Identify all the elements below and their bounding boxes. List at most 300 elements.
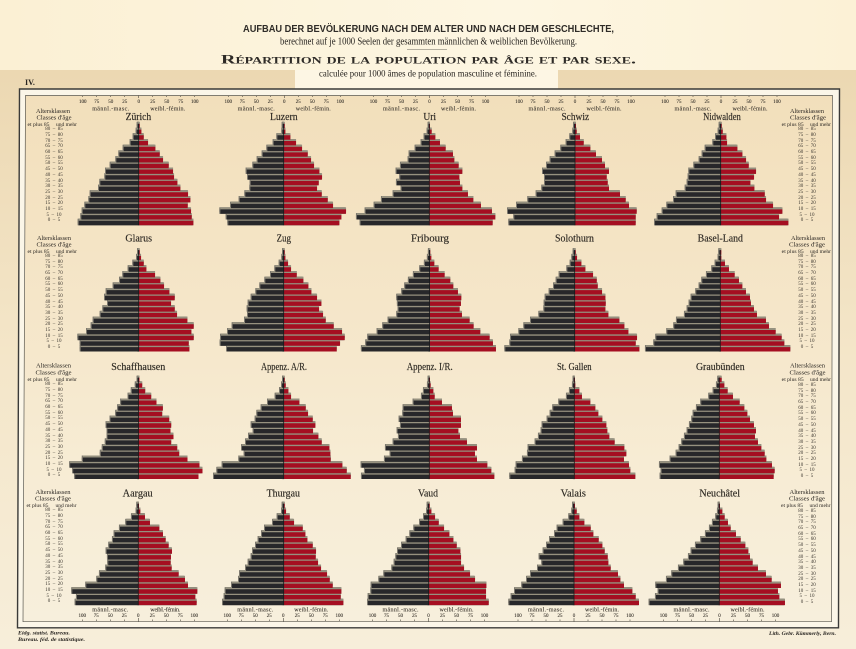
pyramid	[368, 504, 489, 605]
panel: Vaud	[368, 489, 489, 605]
age heading right row 4: und mehr	[810, 503, 831, 509]
bottom axes: 75	[759, 614, 764, 619]
age scale right row 2: 15 – 20	[798, 328, 816, 333]
age scale right row 4: 45 – 50	[798, 549, 816, 554]
age scale left row 1: 5 – 10	[47, 213, 61, 218]
panel: Schwiz	[508, 112, 637, 225]
top axes: 25	[413, 100, 418, 105]
top axes: 25	[558, 100, 564, 105]
bottom axes: 75	[384, 614, 390, 619]
pyramid	[646, 250, 790, 352]
age scale right row 3: 25 – 30	[798, 446, 816, 451]
name: Appenz. A/R.	[261, 362, 307, 373]
bottom axes: 25	[558, 614, 563, 619]
age scale right row 2: 30 – 35	[798, 311, 816, 316]
age scale right row 3: 60 – 65	[798, 406, 816, 411]
age heading right row 4	[781, 489, 831, 509]
pyramid	[509, 504, 639, 605]
age scale right row 4: 75 – 80	[798, 515, 816, 520]
credit right: Lith. Gebr. Kümmerly, Bern.	[768, 631, 836, 637]
age scale left row 2: 70 – 75	[45, 265, 63, 270]
name: Valais	[561, 489, 586, 500]
age heading right row 3: Altersklassen	[790, 362, 825, 369]
pyramid	[362, 378, 494, 479]
top axes: 100	[370, 100, 378, 105]
age heading left row 3: et plus 85	[28, 377, 50, 383]
panel: Nidwalden	[655, 112, 788, 225]
bottom axes: 100	[481, 614, 489, 619]
top axes: 100	[191, 100, 199, 105]
pyramid	[505, 250, 639, 352]
age scale right row 2: 0 – 5	[801, 345, 813, 350]
name: Schaffhausen	[111, 362, 165, 373]
age scale right row 3: 55 – 60	[798, 411, 816, 416]
top axes: 50	[455, 100, 460, 105]
age scale right row 4: 5 – 10	[800, 594, 814, 599]
top axes: 50	[164, 100, 170, 105]
bottom axes: weibl.-fémin.	[440, 606, 474, 613]
bottom axes: 100	[772, 614, 780, 619]
panel: St. Gallen	[510, 362, 635, 479]
pyramid	[70, 378, 202, 479]
age scale left row 2: 25 – 30	[45, 317, 63, 322]
age scale right row 4	[798, 508, 816, 605]
age heading left row 2: Classes d'âge	[36, 242, 72, 248]
age heading left row 4: et plus 85	[26, 503, 49, 509]
pyramid	[223, 504, 343, 605]
age scale right row 2: 45 – 50	[798, 294, 816, 299]
age scale left row 4: 80 – 85	[45, 508, 63, 513]
top axes: 100	[773, 100, 781, 105]
age scale right row 4: 10 – 15	[798, 589, 816, 594]
age scale right row 1: 80 – 85	[798, 127, 816, 132]
bottom axes: 75	[468, 614, 474, 619]
top axes: 0	[137, 100, 140, 105]
panel: Basel-Land	[646, 234, 790, 352]
name: St. Gallen	[557, 362, 592, 373]
age scale left row 2: 65 – 70	[45, 271, 63, 276]
age scale right row 4: 15 – 20	[798, 583, 816, 588]
bottom axes: weibl.-fémin.	[730, 606, 765, 613]
bottom axes: 0	[427, 614, 430, 619]
name: Solothurn	[555, 234, 594, 245]
pyramid	[655, 124, 788, 225]
age heading left row 3: Altersklassen	[36, 362, 71, 369]
bottom axes: 75	[530, 614, 535, 619]
age scale left row 4: 65 – 70	[45, 525, 63, 530]
top axes: 25	[441, 100, 446, 105]
age scale left row 2: 30 – 35	[45, 311, 63, 316]
name: Neuchâtel	[699, 489, 740, 500]
age scale right row 4: 70 – 75	[798, 520, 816, 525]
panel: Schaffhausen	[70, 362, 202, 479]
age scale right row 3: 30 – 35	[798, 440, 816, 445]
age scale right row 2: 80 – 85	[798, 254, 816, 259]
bottom axes: 25	[731, 614, 736, 619]
age scale left row 2: 0 – 5	[48, 345, 60, 350]
age heading left row 4: Altersklassen	[36, 489, 70, 496]
age scale right row 3: 10 – 15	[798, 463, 816, 468]
bottom axes: weibl.-fémin.	[294, 606, 329, 613]
top axes: 75	[94, 100, 100, 105]
age scale right row 1: 70 – 75	[798, 139, 816, 144]
age scale left row 3: 65 – 70	[45, 399, 63, 404]
name: Luzern	[270, 112, 298, 123]
top axes: 75	[469, 100, 474, 105]
age scale right row 4: 80 – 85	[798, 509, 816, 514]
age scale right row 1: 40 – 45	[798, 173, 816, 178]
age heading left row 2	[28, 235, 77, 255]
panel: Fribourg	[362, 234, 496, 352]
bottom axes	[79, 606, 780, 622]
pyramid	[78, 250, 194, 352]
age heading right row 1	[782, 108, 831, 128]
top axes: 75	[760, 100, 766, 105]
bottom axes: 25	[295, 614, 300, 619]
age heading right row 2: und mehr	[810, 249, 831, 255]
age heading right row 2	[782, 235, 831, 255]
age scale left row 3: 40 – 45	[45, 428, 63, 433]
top axes: 100	[482, 100, 490, 105]
name: Glarus	[125, 234, 152, 245]
German heading: AUFBAU DER BEVÖLKERUNG NACH DEM ALTER UND NACH DEM GESCHLECHTE,	[243, 22, 614, 35]
age scale right row 3: 45 – 50	[798, 423, 816, 428]
pyramid	[214, 378, 351, 479]
top axes: weibl.-fémin.	[586, 105, 622, 112]
age scale left row 1: 25 – 30	[45, 190, 63, 195]
pyramid	[79, 124, 193, 225]
bottom axes: 75	[614, 614, 619, 619]
name: Zug	[277, 234, 291, 245]
age scale left row 1: 10 – 15	[45, 207, 63, 212]
age scale right row 3: 20 – 25	[798, 451, 816, 456]
panel: Valais	[509, 489, 639, 605]
age scale left row 4: 50 – 55	[45, 542, 63, 547]
top axes: männl.-masc.	[92, 106, 130, 112]
age heading left row 2: Altersklassen	[37, 235, 71, 242]
top axes: 100	[661, 100, 669, 105]
age scale left row 1: 65 – 70	[45, 144, 63, 149]
pyramid	[508, 124, 637, 225]
age scale left row 2: 75 – 80	[45, 260, 63, 265]
age scale left row 2: 10 – 15	[45, 334, 63, 339]
name: Appenz. I/R.	[407, 362, 453, 373]
top axes: 75	[178, 100, 184, 105]
age heading right row 3	[782, 362, 831, 383]
bottom axes: männl.-masc.	[237, 607, 274, 613]
age heading left row 3: und mehr	[56, 377, 77, 383]
panel: Appenzell A.R.	[214, 362, 351, 479]
age scale right row 2	[798, 254, 816, 350]
pyramid	[660, 378, 775, 479]
age scale left row 3: 80 – 85	[45, 382, 63, 387]
bottom axes: 50	[689, 614, 694, 619]
age scale right row 1: 60 – 65	[798, 150, 816, 155]
age scale right row 1: 0 – 5	[801, 218, 813, 223]
age heading right row 3: et plus 85	[782, 377, 804, 383]
age scale right row 1: 75 – 80	[798, 133, 816, 138]
bottom axes: 50	[253, 614, 258, 619]
age scale right row 4: 35 – 40	[798, 560, 816, 565]
age scale left row 4: 45 – 50	[45, 548, 63, 553]
top axes: 75	[614, 100, 620, 105]
age scale right row 4: 60 – 65	[798, 532, 816, 537]
age heading right row 1: Altersklassen	[790, 108, 824, 115]
bottom axes: 75	[94, 614, 99, 619]
top axes: 25	[586, 100, 592, 105]
age heading left row 1: Altersklassen	[36, 108, 70, 115]
top axes: 25	[268, 100, 273, 105]
credit left: Eidg. statist. Bureau.	[17, 630, 70, 636]
bottom axes: 25	[440, 614, 446, 619]
age scale right row 3: 80 – 85	[798, 383, 816, 388]
age scale right row 2: 40 – 45	[798, 300, 816, 305]
age scale right row 4: 20 – 25	[798, 577, 816, 582]
age scale right row 3: 0 – 5	[801, 474, 813, 479]
age scale left row 3: 75 – 80	[45, 388, 63, 393]
age heading left row 2: et plus 85	[28, 249, 50, 255]
top axes: 100	[515, 100, 523, 105]
name: Vaud	[418, 489, 438, 500]
age scale left row 4: 40 – 45	[45, 554, 63, 559]
age scale right row 2: 10 – 15	[798, 334, 816, 339]
age scale left row 1: 15 – 20	[45, 201, 63, 206]
age scale left row 3: 10 – 15	[45, 462, 63, 467]
age scale left row 2: 35 – 40	[45, 305, 63, 310]
top axes: 25	[704, 100, 710, 105]
bottom axes: 0	[573, 614, 576, 619]
top axes: 50	[108, 100, 114, 105]
age scale right row 4: 65 – 70	[798, 526, 816, 531]
age scale left row 1: 70 – 75	[45, 139, 63, 144]
age heading right row 4: Altersklassen	[790, 489, 824, 496]
age scale right row 1: 25 – 30	[798, 190, 816, 195]
age scale left row 3: 0 – 5	[48, 473, 60, 478]
age scale left row 3: 15 – 20	[45, 456, 63, 461]
pyramid	[72, 504, 197, 605]
bottom axes: 25	[150, 614, 155, 619]
panel: Zürich	[79, 112, 193, 225]
bottom axes: 50	[544, 614, 549, 619]
name: Uri	[423, 112, 436, 123]
age scale left row 1: 40 – 45	[45, 173, 63, 178]
age heading right row 1: et plus 85	[782, 122, 804, 128]
name: Zürich	[126, 112, 151, 123]
credit left: Bureau. féd. de statistique.	[17, 637, 85, 643]
bottom axes: weibl.-fémin.	[150, 606, 181, 613]
age scale right row 4: 0 – 5	[801, 600, 813, 605]
age heading right row 2: et plus 85	[782, 249, 804, 255]
name: Basel-Land	[698, 234, 743, 245]
top axes: männl.-masc.	[528, 106, 566, 112]
age heading left row 1: Classes d'âge	[36, 114, 72, 122]
age scale left row 4: 60 – 65	[45, 531, 63, 536]
plate number: IV.	[25, 78, 35, 87]
top axes: männl.-masc.	[238, 106, 275, 112]
top axes: 100	[225, 100, 233, 105]
age scale right row 2: 20 – 25	[798, 322, 816, 327]
credit left	[17, 630, 85, 643]
age scale right row 3: 35 – 40	[798, 434, 816, 439]
pyramid	[220, 124, 346, 225]
top axes: 50	[254, 100, 259, 105]
age heading left row 3	[28, 362, 77, 383]
age scale left row 4: 25 – 30	[45, 571, 63, 576]
panel: Luzern	[220, 112, 346, 225]
age scale right row 2: 55 – 60	[798, 282, 816, 287]
age scale left row 1	[45, 126, 63, 223]
bottom axes: weibl.-fémin.	[585, 606, 620, 613]
age scale left row 1: 30 – 35	[45, 184, 63, 189]
age scale right row 1: 50 – 55	[798, 161, 816, 166]
top axes: 100	[627, 100, 635, 105]
age scale left row 2: 50 – 55	[45, 288, 63, 293]
age scale left row 1: 55 – 60	[45, 156, 63, 161]
age scale left row 1: 45 – 50	[45, 167, 63, 172]
age scale left row 4: 70 – 75	[45, 520, 63, 525]
name: Schwiz	[561, 112, 590, 123]
top axes: 50	[399, 100, 404, 105]
age scale left row 2: 15 – 20	[45, 328, 63, 333]
bottom axes: 75	[323, 614, 328, 619]
age scale left row 3: 30 – 35	[45, 439, 63, 444]
bottom axes: 100	[369, 614, 377, 619]
age scale left row 2: 5 – 10	[47, 339, 61, 344]
age scale left row 1: 75 – 80	[45, 133, 63, 138]
age scale left row 3: 55 – 60	[45, 411, 63, 416]
bottom axes: 100	[336, 614, 344, 619]
age scale left row 1: 60 – 65	[45, 150, 63, 155]
age scale left row 2: 55 – 60	[45, 282, 63, 287]
top axes: 75	[385, 100, 390, 105]
age scale right row 4: 25 – 30	[798, 572, 816, 577]
age scale right row 2: 50 – 55	[798, 288, 816, 293]
bottom axes: 25	[122, 614, 127, 619]
age scale right row 3: 5 – 10	[800, 468, 814, 473]
age scale right row 4: 40 – 45	[798, 555, 816, 560]
top axes: 0	[574, 100, 577, 105]
age scale right row 4: 55 – 60	[798, 537, 816, 542]
age scale right row 4: 30 – 35	[798, 566, 816, 571]
pyramid	[362, 250, 496, 352]
age heading right row 2: Altersklassen	[791, 235, 825, 242]
age scale left row 4: 20 – 25	[45, 577, 63, 582]
age heading left row 3: Classes d'âge	[36, 370, 72, 376]
age scale right row 3: 65 – 70	[798, 400, 816, 405]
top axes: weibl.-fémin.	[296, 105, 331, 112]
age scale left row 3: 70 – 75	[45, 394, 63, 399]
bottom axes: 100	[514, 614, 522, 619]
age scale left row 3: 5 – 10	[47, 468, 61, 473]
age scale left row 4: 5 – 10	[47, 594, 61, 599]
age scale left row 4: 75 – 80	[45, 514, 63, 519]
age scale left row 3: 60 – 65	[45, 405, 63, 410]
bottom axes: 50	[454, 614, 460, 619]
top axes: 75	[324, 100, 329, 105]
age scale right row 1: 10 – 15	[798, 207, 816, 212]
age scale left row 3	[45, 382, 63, 478]
age scale right row 2: 5 – 10	[800, 339, 814, 344]
panel: Graubünden	[660, 362, 775, 479]
age scale left row 3: 20 – 25	[45, 451, 63, 456]
bottom axes: 25	[412, 614, 418, 619]
top axes: 100	[79, 100, 87, 105]
bottom axes: 0	[137, 614, 140, 619]
age scale left row 3: 50 – 55	[45, 416, 63, 421]
age scale right row 2: 25 – 30	[798, 317, 816, 322]
age scale right row 2: 75 – 80	[798, 260, 816, 265]
top axes: 25	[150, 100, 156, 105]
name: Nidwalden	[703, 112, 741, 123]
top axes: 25	[296, 100, 301, 105]
age scale left row 4: 35 – 40	[45, 560, 63, 565]
bottom axes: 50	[164, 614, 169, 619]
age scale right row 3: 70 – 75	[798, 394, 816, 399]
panel: Glarus	[78, 234, 194, 352]
top axes: weibl.-fémin.	[441, 105, 476, 112]
panel: Uri	[357, 112, 495, 225]
top axes: männl.-masc.	[674, 106, 712, 112]
age heading right row 1: und mehr	[810, 122, 831, 128]
bottom axes: 50	[108, 614, 113, 619]
top axes: 50	[600, 100, 606, 105]
age scale right row 1: 35 – 40	[798, 179, 816, 184]
age scale left row 1: 50 – 55	[45, 161, 63, 166]
top axes: männl.-masc.	[383, 106, 420, 112]
top axes: 50	[746, 100, 752, 105]
panel: Aargau	[72, 489, 197, 605]
bottom axes: 50	[309, 614, 314, 619]
top axes	[79, 96, 781, 112]
panel: Zug	[221, 234, 345, 352]
bottom axes: männl.-masc.	[528, 607, 564, 613]
age scale left row 1: 0 – 5	[48, 218, 60, 223]
bottom axes: 50	[600, 614, 605, 619]
age scale right row 1: 45 – 50	[798, 167, 816, 172]
age scale right row 3: 50 – 55	[798, 417, 816, 422]
bottom axes: 100	[79, 614, 87, 619]
age scale right row 3: 40 – 45	[798, 429, 816, 434]
age scale left row 4: 0 – 5	[48, 599, 60, 604]
bottom axes: männl.-masc.	[92, 607, 129, 613]
top axes: weibl.-fémin.	[732, 105, 768, 112]
age scale right row 1: 20 – 25	[798, 196, 816, 201]
name: Aargau	[123, 489, 153, 500]
bottom axes: 25	[267, 614, 272, 619]
age heading left row 1: et plus 85	[28, 122, 50, 128]
top axes: 75	[676, 100, 682, 105]
bottom axes: 100	[224, 614, 232, 619]
age scale right row 3: 15 – 20	[798, 457, 816, 462]
bottom axes: 75	[178, 614, 183, 619]
age scale left row 4	[45, 508, 63, 604]
age scale right row 3	[798, 382, 816, 479]
age scale left row 4: 55 – 60	[45, 537, 63, 542]
panel: Solothurn	[505, 234, 639, 352]
top axes: 50	[690, 100, 696, 105]
age scale right row 2: 60 – 65	[798, 277, 816, 282]
age scale left row 3: 35 – 40	[45, 434, 63, 439]
pyramid	[357, 124, 495, 225]
bottom axes: 75	[239, 614, 244, 619]
top axes: 100	[337, 100, 345, 105]
top axes: 0	[720, 100, 723, 105]
age heading left row 1	[28, 108, 77, 128]
bottom axes: männl.-masc.	[382, 607, 419, 613]
bottom axes: 100	[626, 614, 634, 619]
bottom axes: 25	[586, 614, 591, 619]
age heading right row 4: et plus 85	[781, 503, 803, 509]
